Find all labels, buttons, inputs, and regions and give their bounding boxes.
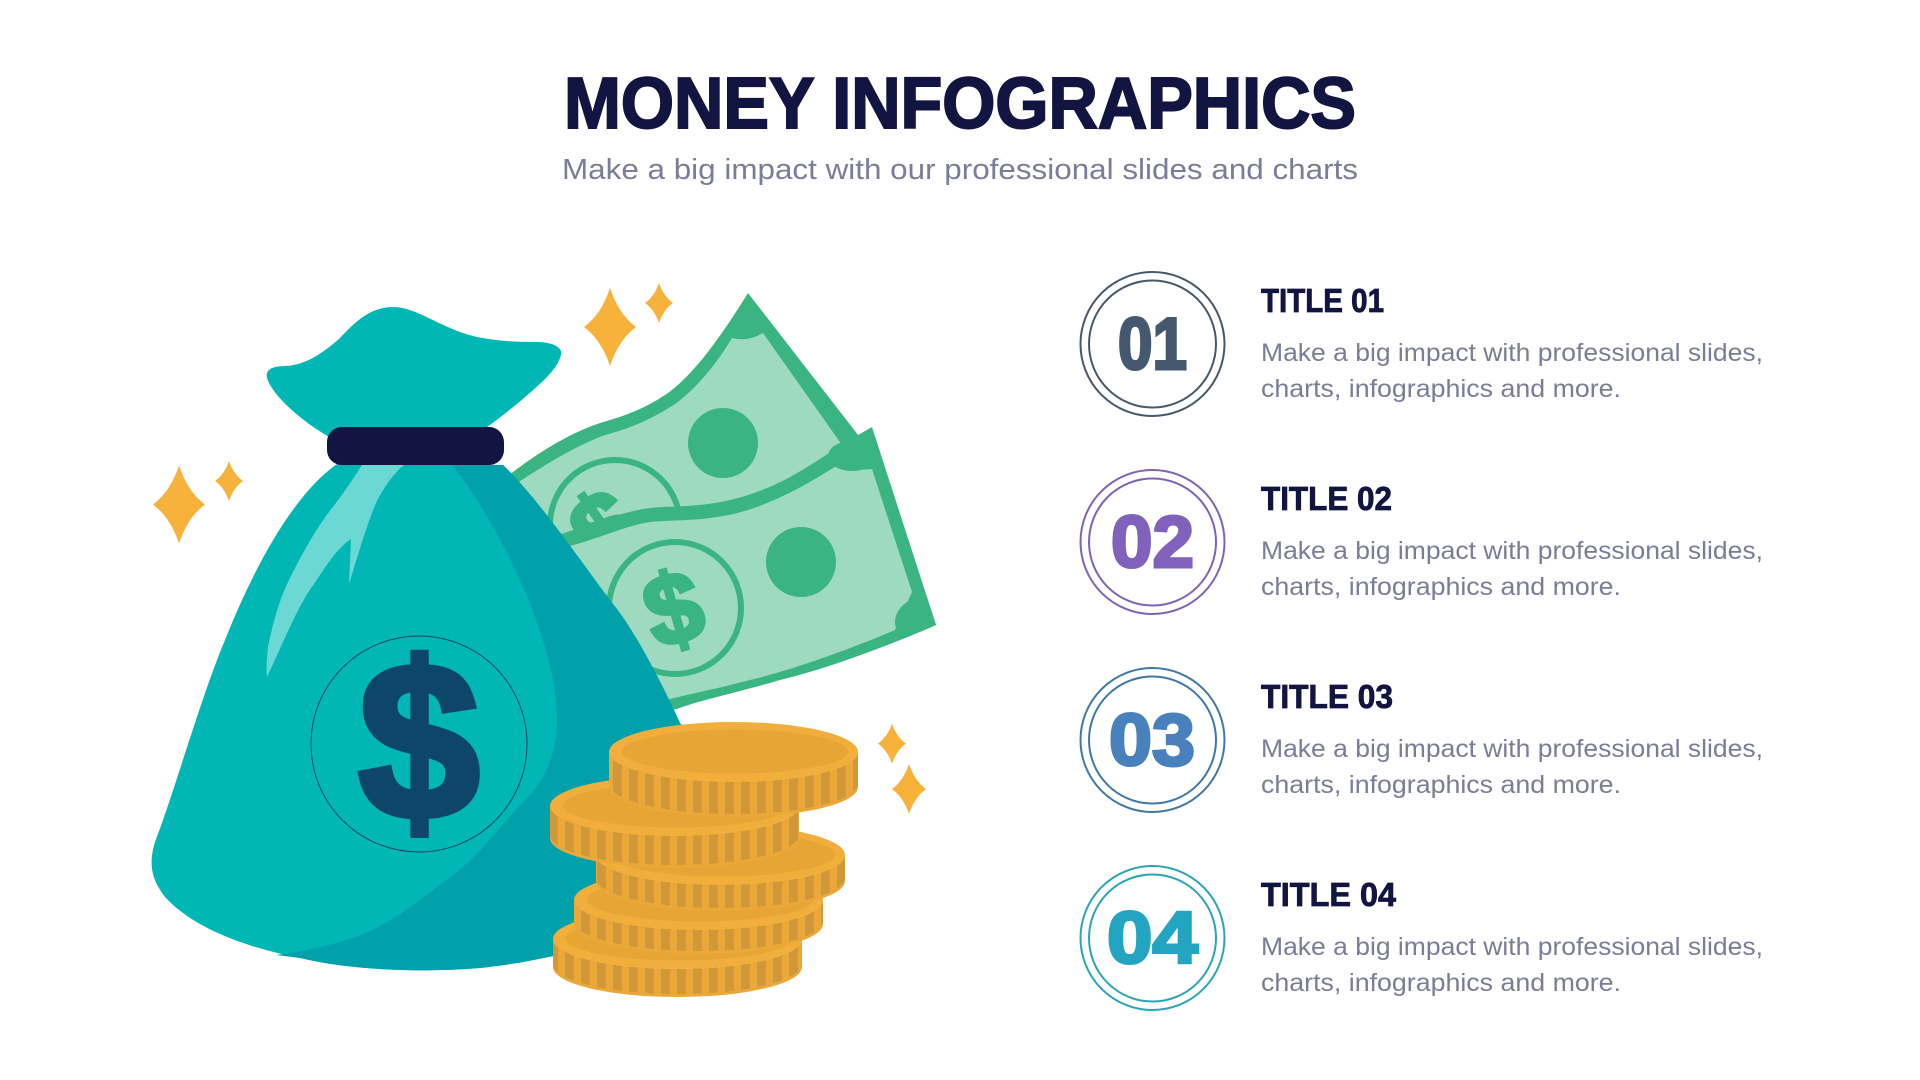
heading 01: TITLE 01 xyxy=(1261,282,1384,319)
bag body xyxy=(152,462,700,970)
badge 02 xyxy=(1080,470,1224,614)
coin 1 xyxy=(609,722,858,817)
bag dollar sign: $ xyxy=(359,617,479,865)
back banknote: $ xyxy=(550,466,659,590)
heading 02: TITLE 02 xyxy=(1261,480,1392,517)
item 04 xyxy=(1080,866,1763,1010)
number 01: 01 xyxy=(1118,304,1187,385)
heading 04: TITLE 04 xyxy=(1261,876,1397,913)
badge 04 xyxy=(1080,866,1224,1010)
description 04: charts, infographics and more. xyxy=(1261,969,1621,997)
bag neck ruffle xyxy=(267,307,561,437)
bag shadow xyxy=(276,465,700,970)
description 04: Make a big impact with professional slides, xyxy=(1261,933,1763,961)
illustration: money bag, bills and coins xyxy=(152,283,969,997)
coin 2 xyxy=(550,776,799,868)
heading 03: TITLE 03 xyxy=(1261,678,1393,715)
item 02 xyxy=(1080,470,1763,614)
tie xyxy=(327,427,504,465)
bag emblem ring xyxy=(311,636,527,852)
badge 03 xyxy=(1080,668,1224,812)
title: MONEY INFOGRAPHICS xyxy=(564,64,1356,144)
item 03 xyxy=(1080,668,1763,812)
item 01 xyxy=(1080,272,1763,416)
coin stack xyxy=(550,722,858,997)
description 02: charts, infographics and more. xyxy=(1261,573,1621,601)
coin 4 xyxy=(574,870,823,954)
subtitle: Make a big impact with our professional slides and charts xyxy=(562,154,1358,186)
coin 5 xyxy=(553,909,802,997)
number 04: 04 xyxy=(1107,898,1198,979)
description 01: charts, infographics and more. xyxy=(1261,375,1621,403)
front banknote xyxy=(562,427,936,710)
sparkles xyxy=(153,283,926,814)
coin 3 xyxy=(596,825,845,911)
back banknote xyxy=(505,293,862,600)
number 02: 02 xyxy=(1111,502,1194,583)
bag highlight xyxy=(267,465,404,677)
number 03: 03 xyxy=(1109,700,1195,781)
description 02: Make a big impact with professional slides, xyxy=(1261,537,1763,565)
front banknote: $ xyxy=(631,548,716,671)
description 01: Make a big impact with professional slides, xyxy=(1261,339,1763,367)
description 03: charts, infographics and more. xyxy=(1261,771,1621,799)
money bag xyxy=(152,307,700,970)
badge 01 xyxy=(1080,272,1224,416)
description 03: Make a big impact with professional slides, xyxy=(1261,735,1763,763)
